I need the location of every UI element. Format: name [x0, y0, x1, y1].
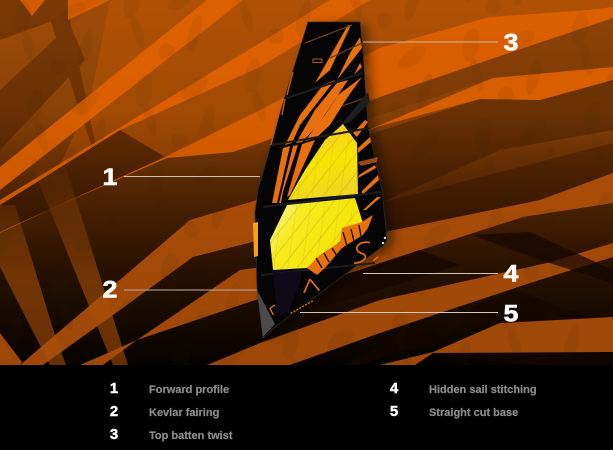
bright orange bands: [0, 0, 613, 233]
legend item 1: [110, 380, 229, 397]
dark gloss: [341, 92, 370, 125]
dark diagonal bands: [0, 0, 613, 233]
callout 3: 3: [504, 30, 518, 56]
sail body: [255, 22, 387, 338]
legend item 5: Straight cut base: [429, 407, 518, 419]
mid orange wash: [60, 0, 613, 165]
callout 1: 1: [103, 164, 117, 191]
legend item 5: [390, 403, 518, 420]
legend item 3: 3: [110, 426, 118, 443]
tack grey patch: [257, 290, 275, 337]
sail logo: [307, 215, 373, 275]
clew eyelets: [382, 237, 386, 244]
yellow panel lower: [270, 198, 363, 270]
legend item 2: 2: [110, 403, 118, 420]
sail: [253, 22, 387, 338]
legend item 4: Hidden sail stitching: [429, 384, 537, 396]
sail shadow: [262, 24, 394, 340]
lower dark panel: [273, 271, 302, 316]
vertical muted bands: [0, 60, 128, 365]
legend item 1: Forward profile: [149, 384, 229, 396]
top batten detail: [305, 25, 368, 106]
battens: [261, 73, 381, 275]
yellow panel upper: [288, 124, 358, 200]
legend item 1: 1: [110, 380, 118, 397]
legend item 3: [110, 426, 233, 443]
callout 2: 2: [103, 277, 117, 303]
orange stripes: [272, 25, 381, 210]
callout 4: 4: [504, 261, 519, 287]
legend item 5: 5: [390, 403, 398, 420]
lower graphics: [270, 242, 378, 315]
leech fairing: [253, 222, 258, 257]
legend item 4: 4: [390, 380, 399, 397]
small emblem and luff lettering: [271, 59, 322, 145]
legend item 4: [390, 380, 537, 397]
lower bands: [0, 173, 613, 365]
callout 5: 5: [504, 301, 518, 327]
legend item 2: Kevlar fairing: [149, 407, 219, 419]
legend: [0, 365, 613, 450]
legend item 3: Top batten twist: [149, 430, 233, 442]
legend item 2: [110, 403, 219, 420]
